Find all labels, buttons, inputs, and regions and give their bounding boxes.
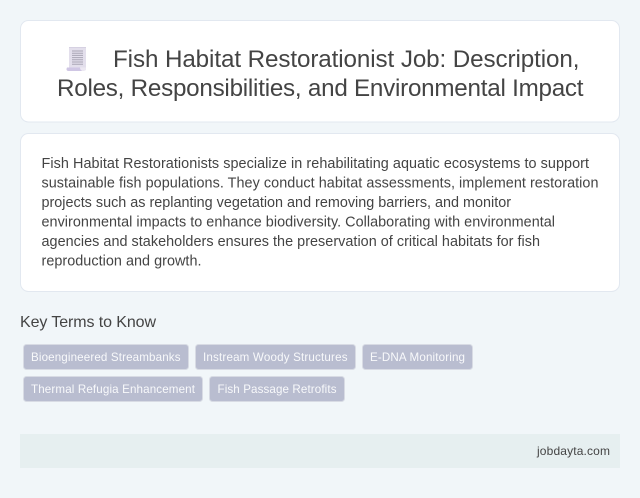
- description text: sustainable fish populations. They conduct habitat assessments, implement restoration: [42, 176, 598, 192]
- tag: E-DNA Monitoring: [362, 344, 472, 370]
- description text: reproduction and growth.: [42, 254, 202, 270]
- description text: projects such as replanting vegetation and removing barriers, and monitor: [42, 195, 511, 211]
- panel: title card: [20, 20, 620, 122]
- description text: [42, 156, 598, 270]
- tag: Thermal Refugia Enhancement: Thermal Refugia Enhancement: [31, 383, 196, 396]
- tag: Bioengineered Streambanks: Bioengineered Streambanks: [31, 351, 181, 364]
- title: Fish Habitat Restorationist Job: Description,: [113, 46, 580, 73]
- heading: key terms: Key Terms to Know: [20, 314, 156, 331]
- title: [57, 46, 584, 102]
- description text: environmental impacts to enhance biodiversity. Collaborating with environmental: [42, 214, 555, 230]
- tag: Fish Passage Retrofits: [210, 376, 344, 402]
- footer bar: jobdayta.com: [536, 444, 610, 458]
- tag: Instream Woody Structures: Instream Woody Structures: [203, 351, 348, 364]
- footer bar: [20, 434, 620, 468]
- tag: E-DNA Monitoring: E-DNA Monitoring: [370, 351, 465, 364]
- tag: Instream Woody Structures: [196, 344, 356, 370]
- tag: Fish Passage Retrofits: Fish Passage Retrofits: [218, 383, 337, 396]
- title: Roles, Responsibilities, and Environmental Impact: [57, 75, 584, 102]
- description text: agencies and stakeholders ensures the preservation of critical habitats for fish: [42, 234, 540, 250]
- tag: Thermal Refugia Enhancement: [24, 376, 202, 402]
- description text: Fish Habitat Restorationists specialize in rehabilitating aquatic ecosystems to support: [42, 156, 589, 172]
- tag: Bioengineered Streambanks: [24, 344, 188, 370]
- panel: description card: [20, 134, 620, 292]
- icon: scroll receipt: [66, 47, 86, 71]
